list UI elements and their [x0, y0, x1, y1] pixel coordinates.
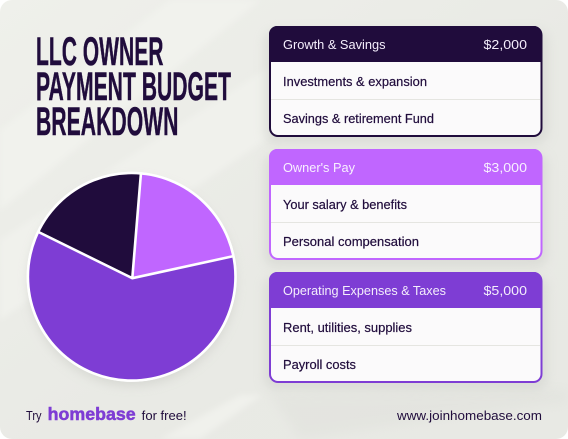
footer: call to action: for free! — [142, 408, 187, 423]
panel header — [269, 149, 542, 185]
header label: Operating Expenses & Taxes — [283, 283, 446, 298]
panel: owner's pay — [269, 149, 542, 259]
homebase logo: homebase — [48, 404, 136, 424]
slice: growth and savings — [38, 173, 141, 278]
title: PAYMENT BUDGET — [36, 65, 231, 109]
list item: Savings & retirement Fund — [283, 111, 434, 126]
list item: Your salary & benefits — [283, 197, 407, 212]
slice: operating expenses and taxes — [28, 232, 236, 380]
panel: operating expenses and taxes — [269, 272, 542, 382]
slice: owner's pay — [132, 174, 234, 278]
list item: Payroll costs — [283, 357, 356, 372]
title — [36, 30, 231, 144]
header amount: $3,000 — [484, 160, 527, 175]
header label: Growth & Savings — [283, 37, 386, 52]
panel header — [269, 272, 542, 308]
title: BREAKDOWN — [36, 100, 178, 144]
pie chart — [27, 172, 237, 382]
footer: call to action — [26, 404, 187, 424]
list item: Rent, utilities, supplies — [283, 320, 412, 335]
title: LLC OWNER — [36, 30, 164, 74]
panel header — [269, 26, 542, 62]
header amount: $2,000 — [484, 37, 527, 52]
list item: Personal compensation — [283, 234, 419, 249]
list item: Investments & expansion — [283, 74, 427, 89]
header amount: $5,000 — [484, 283, 527, 298]
header label: Owner's Pay — [283, 160, 355, 175]
footer: website: www.joinhomebase.com — [396, 408, 542, 423]
panel: growth and savings — [269, 26, 542, 136]
footer: call to action: Try — [26, 408, 42, 423]
